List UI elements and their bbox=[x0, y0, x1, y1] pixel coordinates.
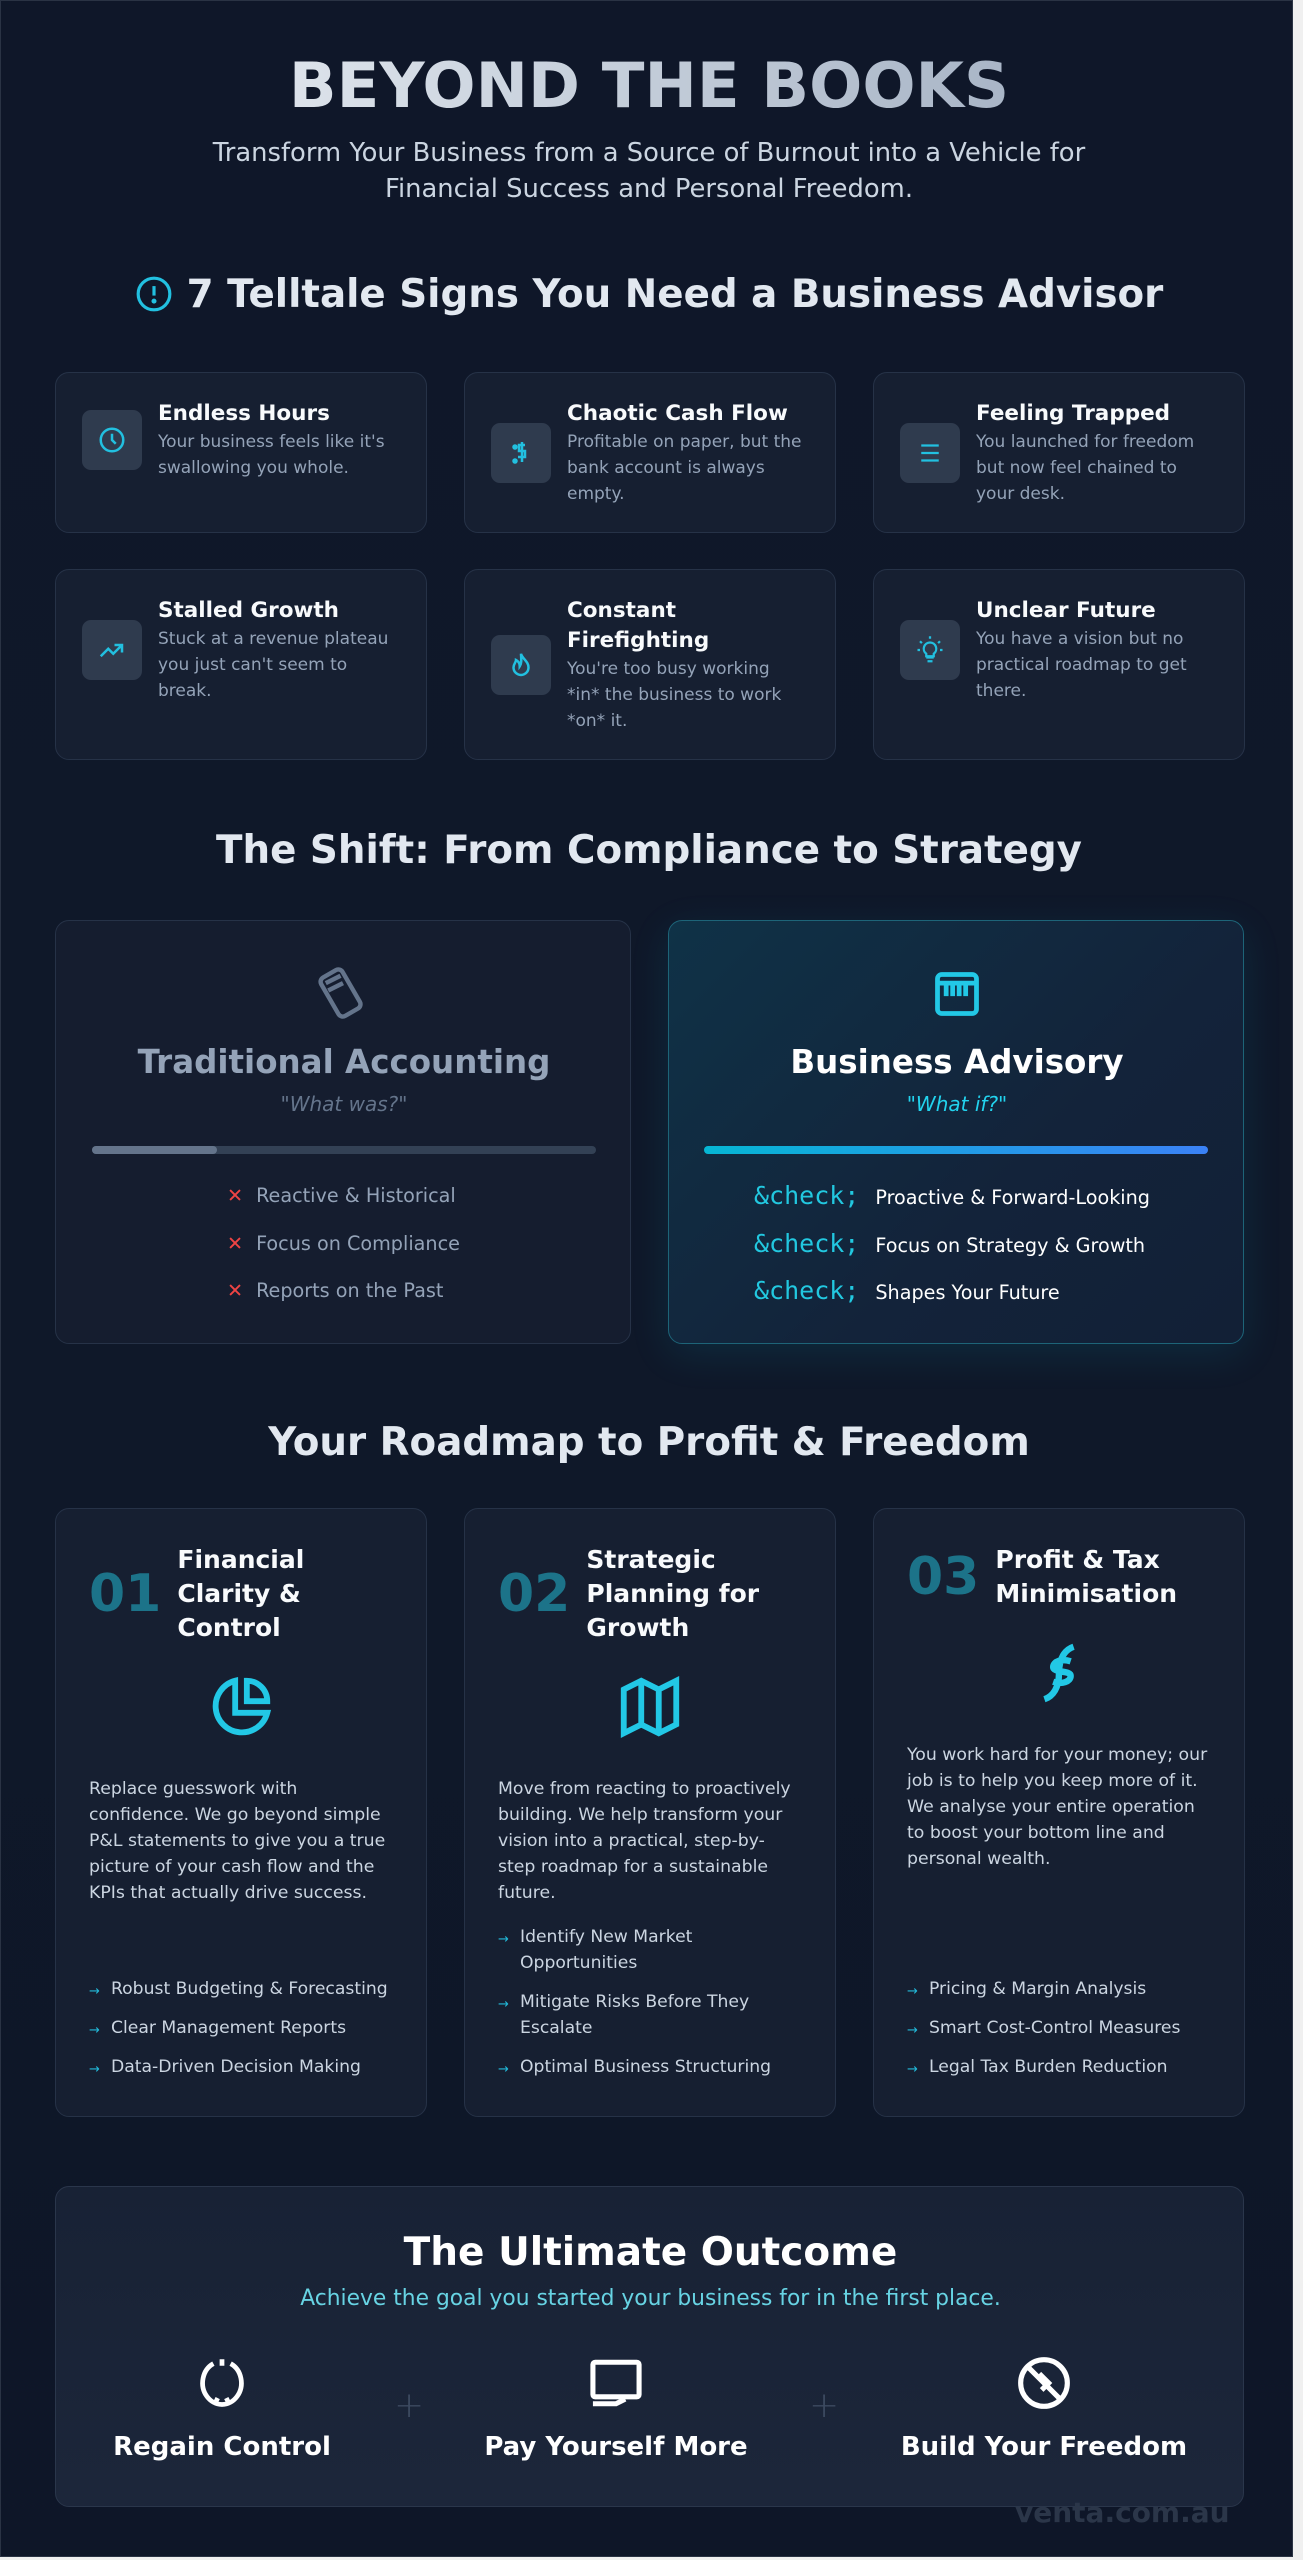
card: Unclear Future: You have a vision but no practical roadmap to get there. bbox=[976, 629, 1187, 701]
roadmap card 01: → bbox=[89, 1984, 100, 1999]
panel: traditional accounting bbox=[55, 920, 631, 1344]
list: ✕ Focus on Compliance bbox=[227, 1232, 460, 1255]
roadmap card 02: Growth bbox=[586, 1613, 689, 1642]
card: Stalled Growth bbox=[55, 569, 427, 760]
roadmap card 02: Strategic bbox=[586, 1545, 716, 1574]
card: Stalled Growth: Stuck at a revenue plateau you just can't seem to break. bbox=[158, 629, 388, 701]
roadmap card 01: Clarity & bbox=[177, 1579, 301, 1608]
item: pay yourself more: Pay Yourself More bbox=[484, 2432, 748, 2462]
title: Business Advisory bbox=[790, 1043, 1124, 1081]
list: ✕ Reactive & Historical bbox=[227, 1184, 456, 1207]
title: Traditional Accounting bbox=[138, 1043, 550, 1081]
roadmap card 02: → bbox=[498, 1932, 509, 1947]
roadmap card 01: Replace guesswork with confidence. We go beyond simple P&L statements to give you a true picture of your cash flow and the KPIs that actually drive success. bbox=[89, 1779, 385, 1903]
heading: 7 signs: 7 Telltale Signs You Need a Business Advisor bbox=[187, 272, 1163, 317]
roadmap card 03: Minimisation bbox=[995, 1579, 1177, 1608]
roadmap card 01: Robust Budgeting & Forecasting bbox=[111, 1979, 388, 1999]
icon: flame bbox=[491, 635, 551, 695]
roadmap card 01 bbox=[55, 1508, 427, 2117]
roadmap card 01: Clear Management Reports bbox=[111, 2018, 346, 2038]
plus: + bbox=[394, 2385, 424, 2426]
card: Chaotic Cash Flow bbox=[464, 372, 836, 533]
list bbox=[754, 1181, 1150, 1305]
card: Stalled Growth: Stalled Growth bbox=[158, 598, 339, 623]
roadmap card 03: You work hard for your money; our job is to help you keep more of it. We analyse your entire operation to boost your bottom line and personal wealth. bbox=[907, 1745, 1207, 1869]
roadmap card 02: Planning for bbox=[586, 1579, 759, 1608]
icon: bulb bbox=[900, 620, 960, 680]
watermark: venta.com.au bbox=[1015, 2496, 1230, 2529]
subtitle: "What was?" bbox=[281, 1092, 407, 1116]
roadmap card 01: 01 bbox=[89, 1564, 161, 1624]
card: Chaotic Cash Flow: Profitable on paper, but the bank account is always empty. bbox=[567, 432, 802, 504]
card: Constant Firefighting: You're too busy working *in* the business to work *on* it. bbox=[567, 659, 781, 731]
icon: eraser bbox=[318, 967, 363, 1019]
heading: roadmap: Your Roadmap to Profit & Freedom bbox=[268, 1420, 1030, 1465]
subtitle: Financial Success and Personal Freedom. bbox=[385, 174, 913, 204]
icon: pie chart bbox=[212, 1677, 271, 1736]
card: Feeling Trapped: You launched for freedom but now feel chained to your desk. bbox=[976, 432, 1194, 504]
list: ✕ Reports on the Past bbox=[227, 1279, 443, 1302]
roadmap card 03: Profit & Tax bbox=[995, 1545, 1160, 1574]
list bbox=[227, 1184, 460, 1302]
card: Feeling Trapped bbox=[873, 372, 1245, 533]
roadmap card 02: → bbox=[498, 2062, 509, 2077]
title: BEYOND THE BOOKS bbox=[289, 49, 1009, 122]
title: The Ultimate Outcome bbox=[404, 2230, 897, 2275]
roadmap card 01: Control bbox=[177, 1613, 281, 1642]
icon: clock bbox=[82, 410, 142, 470]
roadmap card 02: → bbox=[498, 1997, 509, 2012]
icon: dollar bbox=[1043, 1644, 1075, 1702]
plus: + bbox=[809, 2385, 839, 2426]
roadmap card 03: → bbox=[907, 2023, 918, 2038]
card: Chaotic Cash Flow: Chaotic Cash Flow bbox=[567, 401, 788, 426]
roadmap card 02: 02 bbox=[498, 1564, 570, 1624]
card: Endless Hours bbox=[55, 372, 427, 533]
card: Constant Firefighting: Firefighting bbox=[567, 628, 709, 653]
card: Constant Firefighting: Constant bbox=[567, 598, 676, 623]
icon: menu bbox=[900, 423, 960, 483]
card: Endless Hours: Endless Hours bbox=[158, 401, 330, 426]
heading: the shift: The Shift: From Compliance to Strategy bbox=[216, 828, 1082, 873]
card: Constant Firefighting bbox=[464, 569, 836, 760]
roadmap card 02: Identify New Market Opportunities bbox=[520, 1927, 692, 1973]
roadmap card 01: → bbox=[89, 2062, 100, 2077]
item: build your freedom bbox=[901, 2357, 1187, 2462]
panel: ultimate outcome bbox=[55, 2186, 1244, 2507]
roadmap card 03: → bbox=[907, 2062, 918, 2077]
subtitle: Transform Your Business from a Source of Burnout into a Vehicle for bbox=[213, 138, 1085, 168]
card: Unclear Future: Unclear Future bbox=[976, 598, 1156, 623]
icon: map bbox=[620, 1676, 680, 1738]
card: Endless Hours: Your business feels like it's swallowing you whole. bbox=[158, 432, 385, 478]
roadmap card 03: Smart Cost-Control Measures bbox=[929, 2018, 1180, 2038]
card: Feeling Trapped: Feeling Trapped bbox=[976, 401, 1170, 426]
roadmap card 02: Move from reacting to proactively building. We help transform your vision into a practical, step-by-step roadmap for a sustainable future. bbox=[498, 1779, 791, 1903]
item: build your freedom: Build Your Freedom bbox=[901, 2432, 1187, 2462]
roadmap card 03: → bbox=[907, 1984, 918, 1999]
roadmap card 03: Pricing & Margin Analysis bbox=[929, 1979, 1146, 1999]
roadmap card 02: Optimal Business Structuring bbox=[520, 2057, 771, 2077]
roadmap card 01: Financial bbox=[177, 1545, 304, 1574]
item: regain control bbox=[113, 2359, 331, 2462]
card: Unclear Future bbox=[873, 569, 1245, 760]
bar bbox=[92, 1146, 596, 1154]
icon: hand bbox=[935, 972, 979, 1016]
list: &check; Proactive & Forward-Looking bbox=[754, 1181, 1150, 1210]
subtitle: Achieve the goal you started your business for in the first place. bbox=[300, 2286, 1001, 2311]
roadmap card 03: Legal Tax Burden Reduction bbox=[929, 2057, 1168, 2077]
bar bbox=[704, 1146, 1208, 1154]
icon: trend bbox=[82, 620, 142, 680]
list: &check; Focus on Strategy & Growth bbox=[754, 1229, 1145, 1258]
item: regain control: Regain Control bbox=[113, 2432, 331, 2462]
item: pay yourself more bbox=[484, 2360, 748, 2462]
list: &check; Shapes Your Future bbox=[754, 1276, 1060, 1305]
roadmap card 02: Mitigate Risks Before They Escalate bbox=[520, 1992, 749, 2038]
roadmap card 03 bbox=[873, 1508, 1245, 2117]
roadmap card 02 bbox=[464, 1508, 836, 2117]
subtitle: "What if?" bbox=[907, 1092, 1007, 1116]
roadmap card 03: 03 bbox=[907, 1547, 979, 1607]
roadmap card 01: → bbox=[89, 2023, 100, 2038]
subtitle bbox=[212, 138, 1086, 204]
roadmap card 01: Data-Driven Decision Making bbox=[111, 2057, 361, 2077]
panel: business advisory bbox=[668, 920, 1244, 1344]
icon: cash bbox=[491, 423, 551, 483]
title bbox=[1, 46, 1297, 126]
